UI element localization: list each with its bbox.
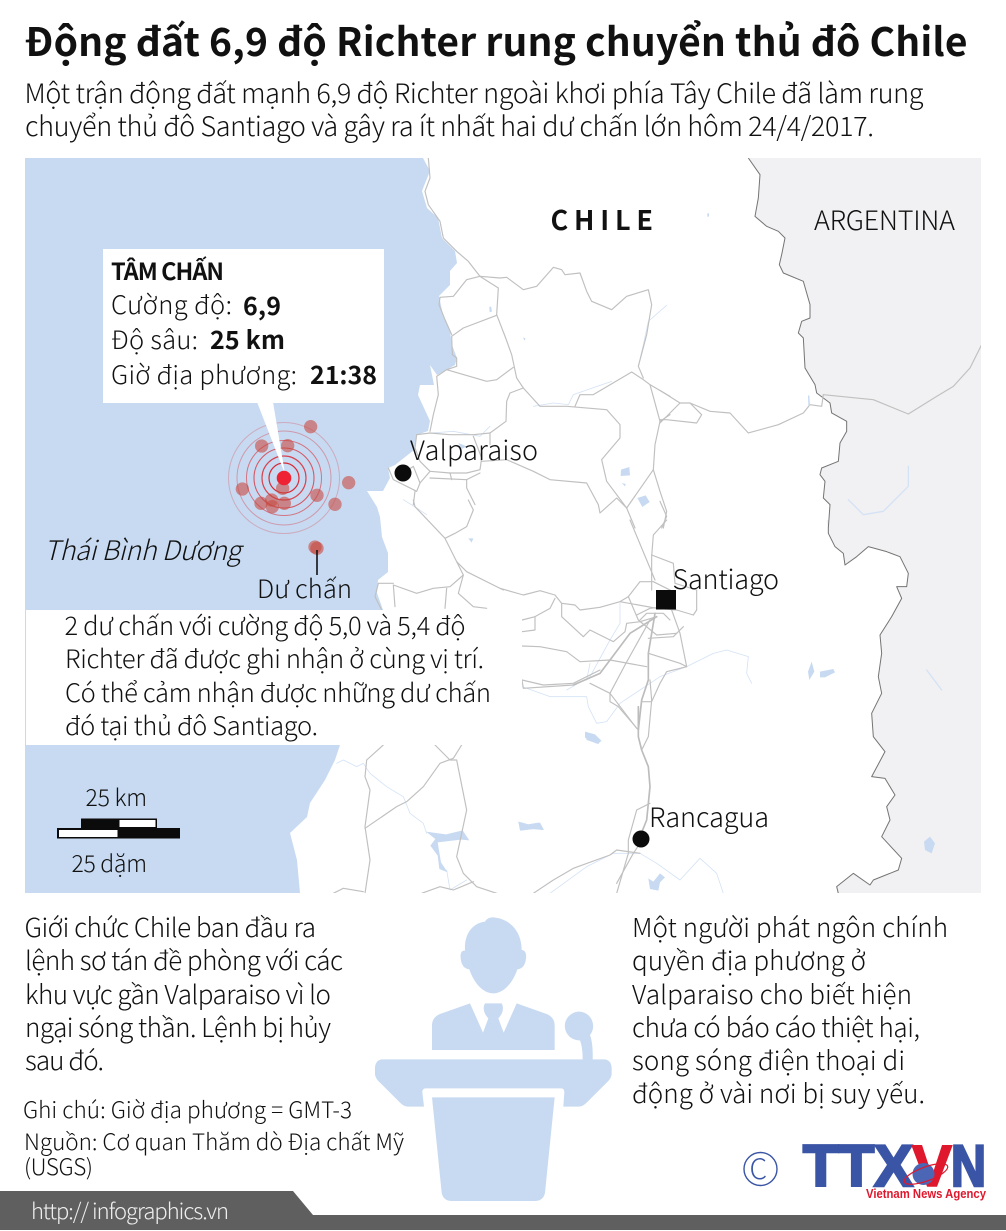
map: roads and rivers north [388, 158, 670, 528]
text block: spokesperson: chưa có báo cáo thiệt hại, [632, 1008, 920, 1045]
scale bar [57, 788, 180, 877]
marker: Valparaiso: Valparaiso [410, 429, 538, 468]
intro text [24, 72, 924, 144]
source notes: (USGS) [24, 1150, 93, 1182]
text block: evacuation [24, 908, 343, 1078]
panel: aftershock note: Richter đã được ghi nhận ở cùng vị trí. [65, 639, 484, 676]
text block: evacuation: sau đó. [25, 1041, 104, 1078]
map: aftershock leader line [316, 550, 318, 575]
panel: aftershock note: Có thể cảm nhận được những dư chấn [65, 673, 491, 710]
label: Pacific Ocean: Thái Bình Dương [44, 529, 244, 568]
label: aftershock: Dư chấn [257, 569, 352, 606]
logo: TTXVN [803, 1134, 987, 1201]
marker: Valparaiso [394, 438, 536, 482]
text block: spokesperson: Một người phát ngôn chính [632, 908, 948, 945]
footer bar: http:// infographics.vn [31, 1194, 229, 1226]
map: Santiago road network [500, 520, 942, 893]
text block: evacuation: Giới chức Chile ban đầu ra [24, 908, 316, 945]
marker: Santiago [656, 568, 778, 610]
marker: Rancagua [632, 808, 767, 848]
text block: spokesperson: động ở vài nơi bị suy yếu. [632, 1074, 925, 1111]
icon: speaker at podium [375, 917, 612, 1201]
footer bar [0, 1191, 1006, 1230]
logo: TTXVN: N [951, 1134, 986, 1199]
callout: epicentre data [103, 249, 384, 403]
text block: spokesperson: Valparaiso cho biết hiện [632, 975, 912, 1012]
label: Argentina: ARGENTINA [814, 199, 955, 238]
source notes [23, 1093, 404, 1182]
panel: aftershock note: đó tại thủ đô Santiago. [65, 706, 318, 743]
scale bar: 25 km [86, 779, 147, 813]
map: earthquake rings [228, 422, 340, 534]
text block: spokesperson [632, 908, 948, 1111]
intro text: chuyển thủ đô Santiago và gây ra ít nhất hai dư chấn lớn hôm 24/4/2017. [25, 105, 874, 144]
title: Động đất 6,9 độ Richter rung chuyển thủ đô Chile [24, 12, 968, 68]
marker: Rancagua: Rancagua [649, 796, 769, 835]
panel: aftershock note [26, 606, 522, 745]
callout: epicentre data: Cường độ: [111, 285, 232, 322]
source notes: Nguồn: Cơ quan Thăm dò Địa chất Mỹ [24, 1125, 404, 1157]
logo: TTXVN: V [912, 1134, 952, 1199]
panel: map [25, 158, 982, 893]
map: Pacific Ocean [25, 158, 457, 893]
callout: epicentre data: Giờ địa phương: [111, 355, 297, 392]
callout: epicentre data: TÂM CHẤN [111, 253, 224, 287]
text block: spokesperson: song sóng điện thoại di [632, 1041, 905, 1078]
icon: copyright [744, 1148, 777, 1188]
label: Chile: CHILE [550, 199, 653, 238]
callout: epicentre data: 6,9 [243, 287, 281, 323]
map: epicentre dot [277, 471, 291, 485]
callout: epicentre data: 25 km [210, 321, 285, 357]
map: epicentre pointer [257, 402, 285, 474]
logo: TTXVN: Vietnam News Agency [866, 1186, 987, 1201]
map: roads and rivers southwest [333, 500, 602, 893]
callout: epicentre data: Độ sâu: [111, 320, 198, 357]
map: Argentina [748, 158, 981, 893]
panel: aftershock note: 2 dư chấn với cường độ 5,0 và 5,4 độ [64, 606, 466, 643]
callout: epicentre data: 21:38 [310, 356, 377, 392]
marker: Santiago: Santiago [672, 558, 779, 597]
intro text: Một trận động đất mạnh 6,9 độ Richter ngoài khơi phía Tây Chile đã làm rung [24, 72, 924, 111]
text block: evacuation: khu vực gần Valparaiso vì lo [25, 975, 331, 1012]
scale bar: 25 dặm [72, 845, 147, 879]
icon: copyright: C [750, 1148, 767, 1188]
map: aftershock dots [236, 420, 355, 555]
logo: TTXVN: TTX [803, 1134, 913, 1199]
source notes: Ghi chú: Giờ địa phương = GMT-3 [23, 1093, 352, 1125]
text block: spokesperson: quyền địa phương ở [632, 941, 866, 978]
text block: evacuation: lệnh sơ tán đề phòng với các [25, 941, 343, 978]
text block: evacuation: ngại sóng thần. Lệnh bị hủy [25, 1008, 331, 1045]
